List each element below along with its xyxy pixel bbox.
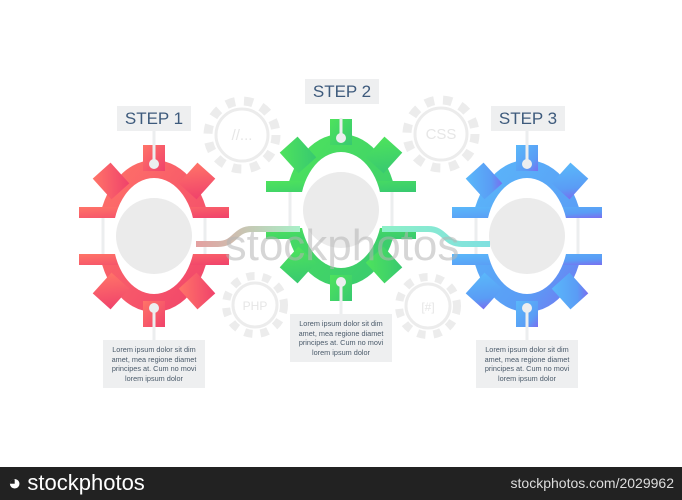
gear 1 (74, 131, 234, 341)
ghost gear: PHP: PHP (243, 299, 267, 313)
connector 1 (196, 229, 300, 244)
label: step 2: STEP 2 (313, 82, 371, 101)
gear 2 (261, 118, 421, 315)
ghost gear: comment (208, 101, 276, 169)
footer url: stockphotos.com/2029962 (511, 475, 674, 491)
ghost gear: CSS: CSS (426, 126, 456, 143)
label: step 1: STEP 1 (125, 109, 183, 128)
ghost gear: hash: [#] (421, 300, 435, 314)
ghost gear: hash (399, 277, 457, 335)
ghost gear: comment: //... (232, 127, 252, 144)
text: step 2: Lorem ipsum dolor sit dim amet, mea regione diamet principes at. Cum no movi lorem ipsum dolor (299, 319, 383, 356)
text: step 1 (103, 340, 205, 388)
text: step 2 (290, 314, 392, 362)
watermark: stockphotos (225, 221, 459, 270)
ghost gear: PHP (226, 276, 284, 334)
text: step 3: Lorem ipsum dolor sit dim amet, mea regione diamet principes at. Cum no movi lorem ipsum dolor (485, 345, 569, 382)
footer logo: ◕ stockphotos (8, 470, 145, 495)
label: step 1 (117, 106, 191, 131)
label: step 3 (491, 106, 565, 131)
label: step 2 (305, 79, 379, 104)
text: step 3 (476, 340, 578, 388)
ghost gear: CSS (407, 100, 475, 168)
text: step 1: Lorem ipsum dolor sit dim amet, mea regione diamet principes at. Cum no movi lorem ipsum dolor (112, 345, 196, 382)
label: step 3: STEP 3 (499, 109, 557, 128)
gear 3 (447, 131, 607, 341)
footer bar (0, 467, 682, 500)
connector 2 (382, 229, 490, 244)
